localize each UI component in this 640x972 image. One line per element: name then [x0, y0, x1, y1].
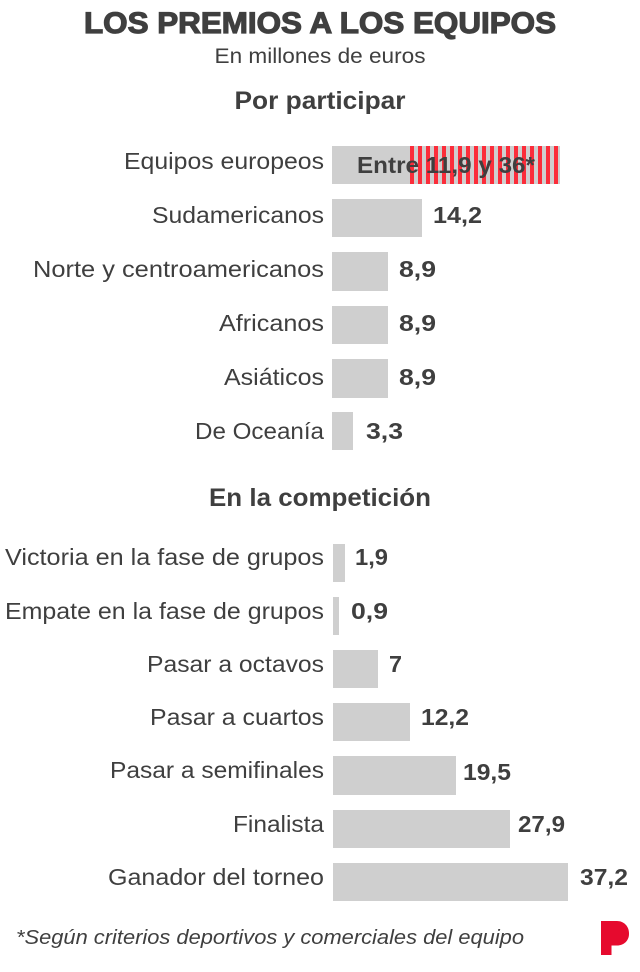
row: sudamericanos: 14,2 [433, 202, 482, 228]
row: semifinales: Pasar a semifinales [110, 757, 324, 783]
row: ganador: 37,2 [580, 864, 628, 890]
row: de oceania [195, 412, 403, 450]
row: sudamericanos: Sudamericanos [152, 202, 324, 228]
row: de oceania: De Oceanía [195, 418, 324, 444]
row: norte y centroamericanos: Norte y centroamericanos [33, 256, 324, 282]
row: victoria: Victoria en la fase de grupos [5, 544, 324, 570]
row: cuartos: 12,2 [421, 704, 469, 730]
heading: en la competicion: En la competición [209, 484, 431, 512]
row: norte y centroamericanos: 8,9 [399, 256, 436, 282]
row: finalista [233, 810, 565, 848]
row: ganador [108, 863, 628, 901]
chart: en la competicion [5, 484, 628, 901]
row: victoria: 1,9 [355, 544, 388, 570]
row: finalista: 27,9 [518, 811, 565, 837]
row: octavos: Pasar a octavos [147, 651, 324, 677]
row: equipos europeos [124, 146, 560, 184]
row: empate: Empate en la fase de grupos [5, 598, 324, 624]
icon: logo P [601, 921, 629, 955]
subtitle: En millones de euros [214, 45, 426, 68]
row: finalista: Finalista [233, 811, 324, 837]
row: asiaticos: 8,9 [399, 364, 436, 390]
row: octavos: 7 [389, 651, 402, 677]
row: victoria [5, 544, 388, 582]
row: africanos: 8,9 [399, 310, 436, 336]
row: africanos [219, 306, 436, 344]
row: norte y centroamericanos [33, 252, 436, 291]
row: africanos: Africanos [219, 310, 324, 336]
heading: por participar: Por participar [234, 87, 406, 115]
row: equipos europeos: Equipos europeos [124, 148, 324, 174]
row: sudamericanos [152, 199, 482, 237]
row: asiaticos [224, 359, 436, 398]
row: asiaticos: Asiáticos [224, 364, 324, 390]
row: cuartos: Pasar a cuartos [150, 704, 324, 730]
row: equipos europeos: Entre 11,9 y 36* [357, 152, 535, 178]
row: de oceania: 3,3 [366, 418, 403, 444]
row: semifinales [110, 756, 511, 795]
footnote: *Según criterios deportivos y comerciales del equipo [16, 927, 524, 949]
row: ganador: Ganador del torneo [108, 864, 324, 890]
row: cuartos [150, 703, 469, 741]
row: semifinales: 19,5 [463, 759, 511, 785]
chart: por participar [33, 87, 560, 450]
title: LOS PREMIOS A LOS EQUIPOS [84, 7, 556, 40]
row: empate [5, 597, 388, 635]
row: empate: 0,9 [351, 598, 388, 624]
row: octavos [147, 650, 402, 688]
